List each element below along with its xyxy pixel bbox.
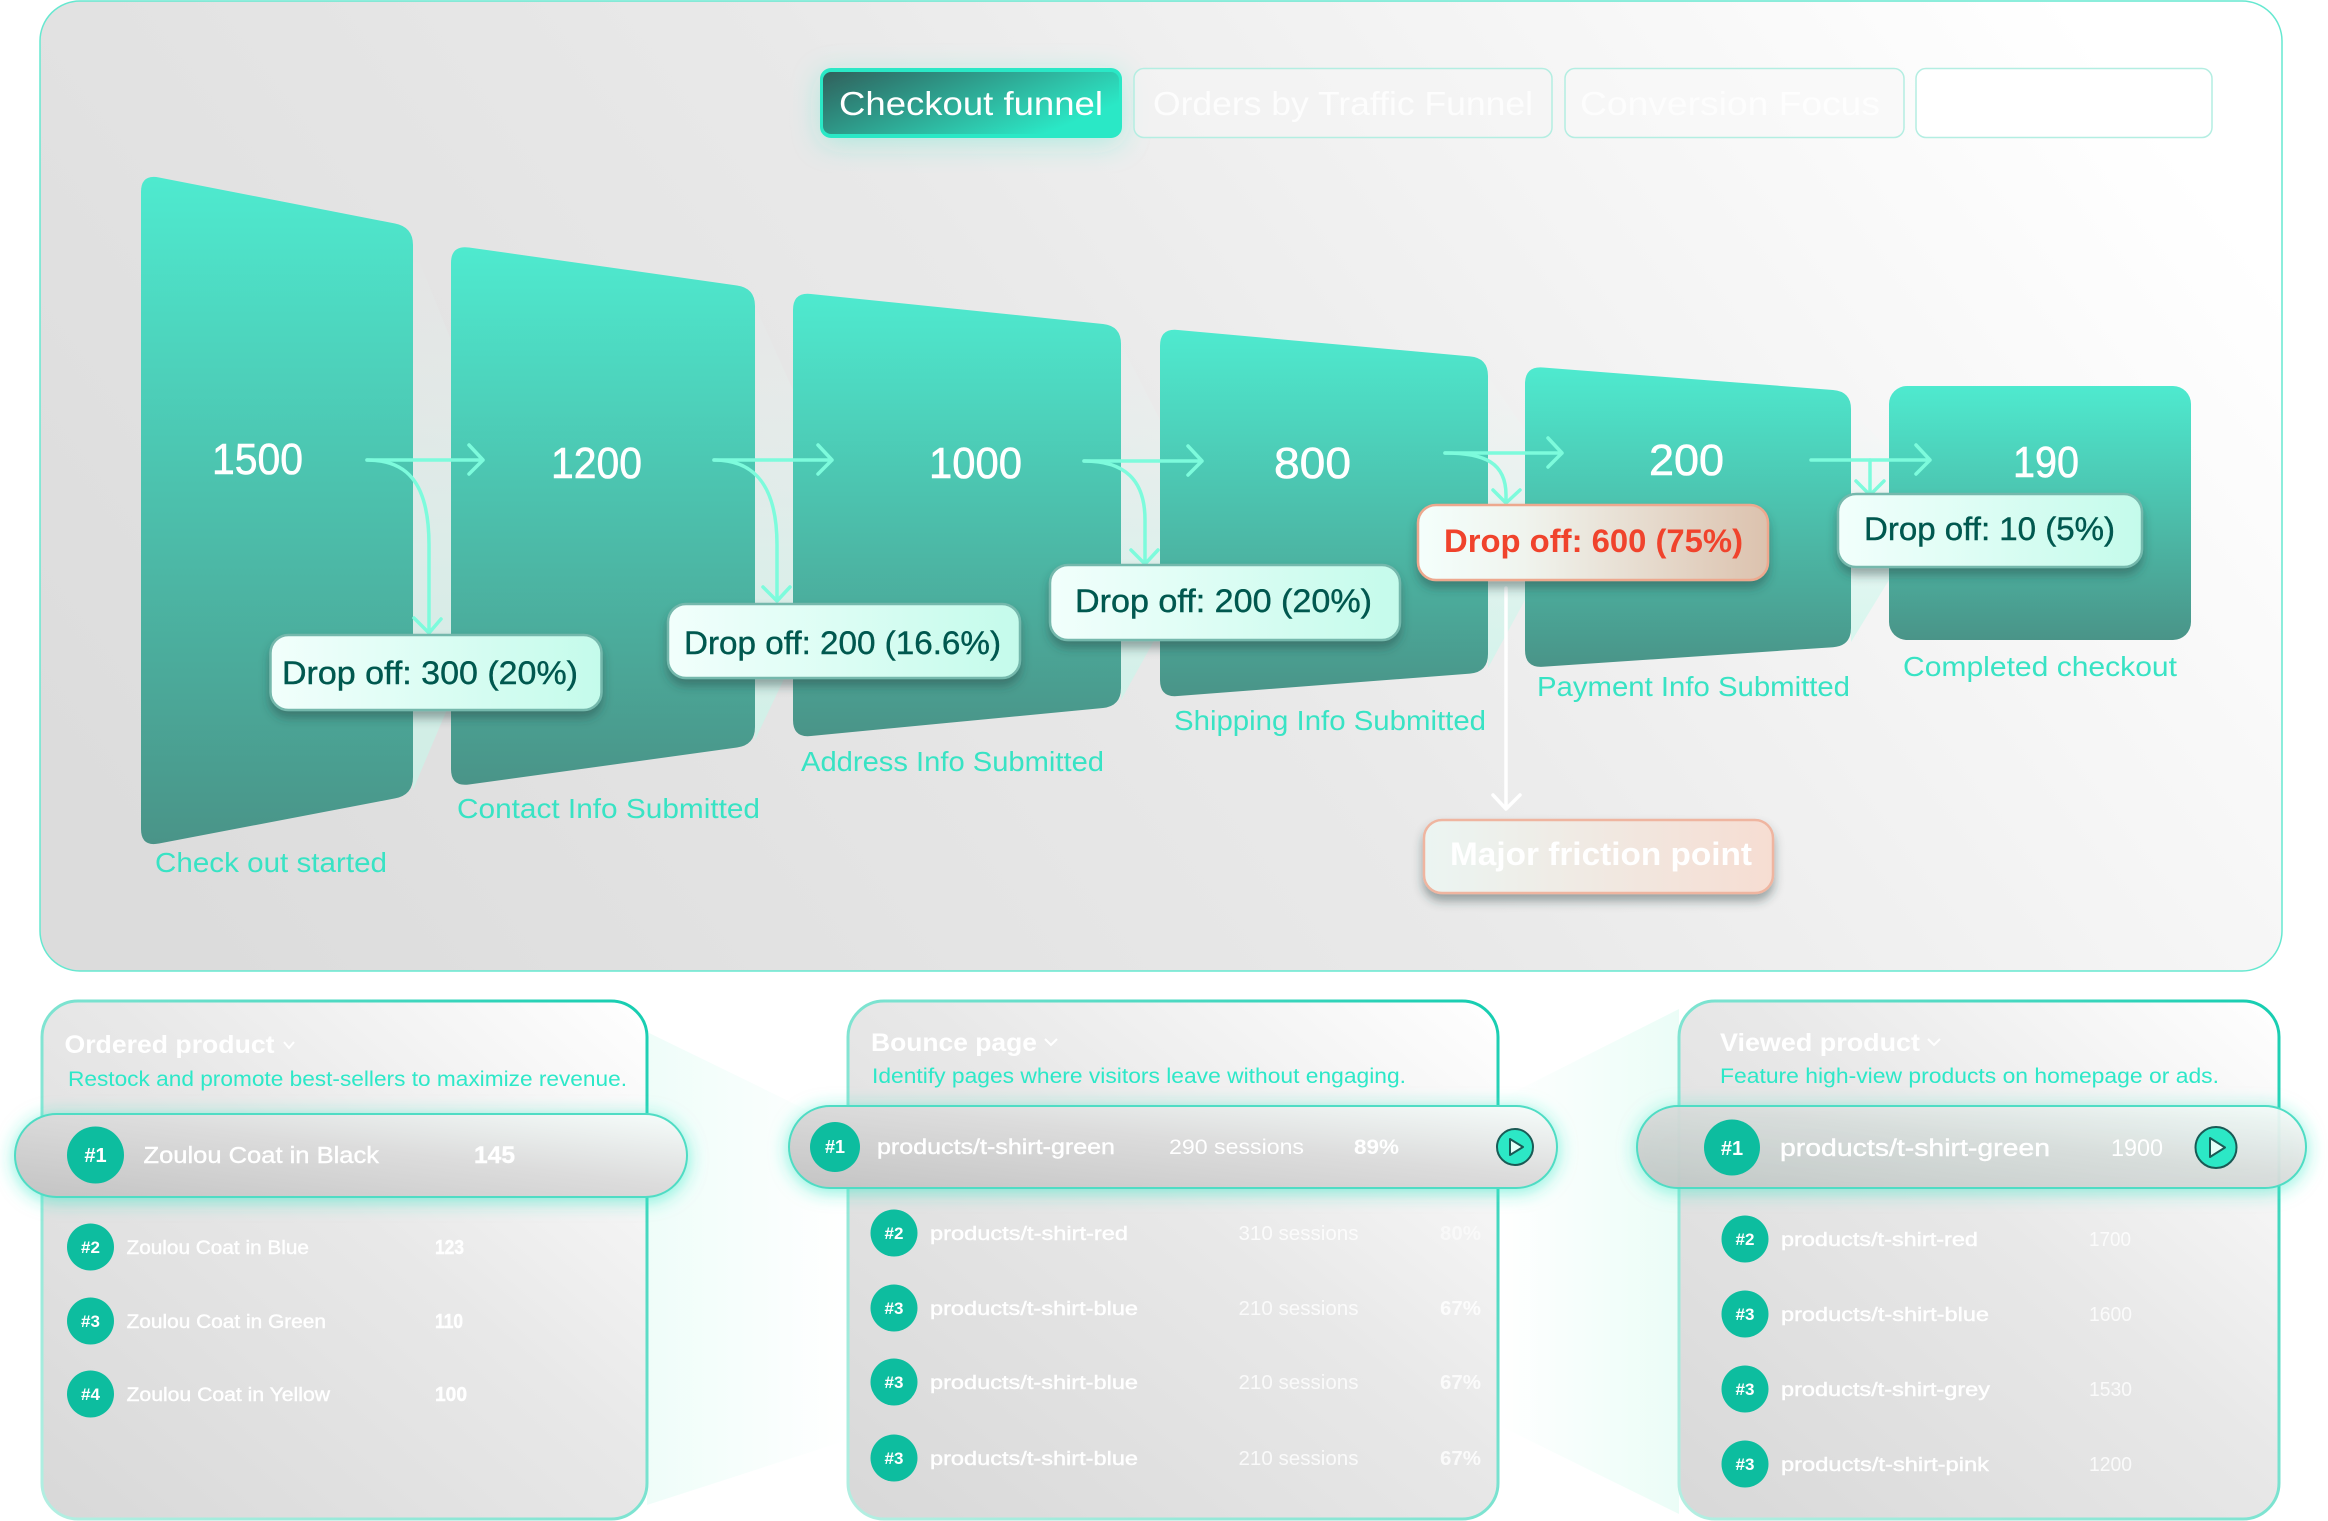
subtitle: Feature high-view products on homepage or ads. <box>1720 1065 2219 1088</box>
arrow: stage 4 to 5 with drop off <box>1445 438 1562 503</box>
row: #3: Zoulou Coat in Green <box>126 1312 326 1333</box>
arrow: stage 3 to 4 with drop off <box>1084 446 1202 564</box>
row: #3 third <box>870 1434 1481 1482</box>
panel: checkout funnel <box>40 1 2282 971</box>
icon: play <box>2196 1127 2236 1168</box>
row: #2 <box>1722 1216 2131 1262</box>
callout: drop off 200 (16.6%): Drop off: 200 (16.6%) <box>684 625 1001 661</box>
row: #2: Zoulou Coat in Blue <box>126 1238 309 1259</box>
row: #3 blue: 1600 <box>2089 1304 2132 1326</box>
funnel stage: Payment Info Submitted, 200: Payment Info Submitted <box>1537 671 1850 702</box>
row: #3 <box>870 1284 1481 1332</box>
highlight row: #1: products/t-shirt-green <box>877 1136 1115 1159</box>
highlight row: #1: 1900 <box>2111 1135 2163 1162</box>
callout: major friction point: Major friction point <box>1450 836 1752 872</box>
row: #4: 100 <box>435 1384 467 1406</box>
row: #3 pink: 1200 <box>2089 1454 2132 1476</box>
funnel stage: Shipping Info Submitted, 800: 800 <box>1274 439 1351 488</box>
row: #3: 67% <box>1440 1298 1481 1320</box>
arrow: stage 2 to 3 with drop off <box>714 445 832 601</box>
panel: bounce page <box>789 1001 1557 1519</box>
row: #3 <box>67 1298 463 1344</box>
row: #4: #4 <box>81 1385 100 1404</box>
row: #3 blue: #3 <box>1736 1305 1754 1324</box>
row: #3: 210 sessions <box>1238 1298 1358 1320</box>
row: #2: 310 sessions <box>1238 1223 1358 1245</box>
callout: major friction point <box>1424 820 1773 893</box>
row: #3 second: #3 <box>885 1373 903 1392</box>
row: #3 second <box>870 1358 1481 1406</box>
panel: viewed product <box>1637 1001 2306 1519</box>
highlight row: #1: #1 <box>1721 1138 1743 1160</box>
row: #2 <box>67 1224 464 1270</box>
subtitle: Restock and promote best-sellers to maximize revenue. <box>68 1068 627 1091</box>
row: #3 grey: 1530 <box>2089 1379 2132 1401</box>
funnel connectors <box>413 245 1889 790</box>
icon: play <box>1497 1129 1533 1165</box>
row: #2: #2 <box>885 1224 903 1243</box>
heading: ordered product: Ordered product <box>64 1031 275 1059</box>
tab: Conversion Focus <box>1565 68 1904 138</box>
funnel stage: Check out started, 1500: 1500 <box>212 435 303 484</box>
callout: drop off 200 (16.6%) <box>668 604 1020 678</box>
tab: Orders by Traffic Funnel <box>1134 68 1552 138</box>
callout: drop off 200 (20%): Drop off: 200 (20%) <box>1075 583 1372 619</box>
funnel stage: Contact Info Submitted, 1200: 1200 <box>551 439 642 488</box>
row: #3 third: products/t-shirt-blue <box>930 1449 1138 1470</box>
row: #3 second: 210 sessions <box>1238 1372 1358 1394</box>
row: #3: #3 <box>81 1312 100 1331</box>
subtitle: Identify pages where visitors leave without engaging. <box>872 1065 1406 1088</box>
heading: viewed product: Viewed product <box>1720 1029 1921 1057</box>
arrow: stage 1 to 2 with drop off <box>367 445 483 633</box>
highlight row: #1: #1 <box>84 1145 107 1167</box>
funnel stage: Check out started, 1500 <box>141 177 413 878</box>
row: #3 pink <box>1722 1440 2132 1488</box>
arrow: to major friction point <box>1493 588 1520 809</box>
row: #2: products/t-shirt-red <box>930 1224 1128 1245</box>
arrow: stage 5 to 6 with drop off <box>1811 445 1930 495</box>
funnel stage: Shipping Info Submitted, 800: Shipping Info Submitted <box>1174 705 1486 736</box>
row: #4 <box>67 1370 467 1418</box>
row: #3 grey: #3 <box>1736 1380 1754 1399</box>
highlight row: #1 <box>789 1106 1557 1188</box>
callout: drop off 300: Drop off: 300 (20%) <box>282 655 578 691</box>
row: #2 <box>870 1210 1481 1256</box>
row: #3 third: 67% <box>1440 1448 1481 1470</box>
funnel stage: Completed checkout, 190: Completed checkout <box>1903 651 2177 682</box>
highlight row: #1: 290 sessions <box>1169 1136 1304 1159</box>
row: #3 third: 210 sessions <box>1238 1448 1358 1470</box>
callout: drop off 300 <box>270 635 602 710</box>
row: #2: #2 <box>81 1238 100 1257</box>
funnel stage: Completed checkout, 190 <box>1889 386 2191 682</box>
row: #3 blue: products/t-shirt-blue <box>1781 1305 1989 1326</box>
callout: drop off 10 (5%) <box>1838 494 2142 567</box>
highlight row: #1: 89% <box>1354 1136 1399 1159</box>
row: #3 blue <box>1722 1290 2132 1338</box>
row: #3 pink: products/t-shirt-pink <box>1781 1455 1990 1476</box>
funnel stage: Check out started, 1500: Check out started <box>155 847 387 878</box>
tab: Conversion Focus: Conversion Focus <box>1580 85 1880 122</box>
row: #2: 1700 <box>2089 1229 2131 1251</box>
funnel stage: Address Info Submitted, 1000: 1000 <box>929 439 1022 488</box>
row: #3: 110 <box>435 1311 463 1333</box>
highlight row: #1 <box>15 1114 687 1197</box>
highlight row: #1: products/t-shirt-green <box>1780 1135 2050 1162</box>
heading: bounce page: Bounce page <box>871 1029 1037 1057</box>
tab: Checkout funnel (active) <box>820 68 1122 138</box>
tab: Checkout funnel (active): Checkout funnel <box>839 85 1103 122</box>
row: #3: products/t-shirt-blue <box>930 1299 1138 1320</box>
panel: ordered product <box>15 1001 687 1519</box>
highlight row: #1: 145 <box>474 1142 515 1169</box>
row: #4: Zoulou Coat in Yellow <box>126 1385 330 1406</box>
row: #2: 80% <box>1440 1223 1481 1245</box>
highlight row: #1 <box>1637 1106 2306 1188</box>
funnel stage: Shipping Info Submitted, 800 <box>1160 330 1488 736</box>
callout: drop off 600 (75%): Drop off: 600 (75%) <box>1444 523 1743 559</box>
row: #3 third: #3 <box>885 1449 903 1468</box>
row: #3 grey: products/t-shirt-grey <box>1781 1380 1991 1401</box>
funnel stage: Contact Info Submitted, 1200 <box>451 247 760 824</box>
row: #2: #2 <box>1736 1230 1754 1249</box>
funnel stage: Contact Info Submitted, 1200: Contact Info Submitted <box>457 793 760 824</box>
funnel stage: Address Info Submitted, 1000: Address Info Submitted <box>801 746 1104 777</box>
callout: drop off 600 (75%) <box>1418 505 1768 580</box>
row: #3 second: 67% <box>1440 1372 1481 1394</box>
tab: Orders by Traffic Funnel: Orders by Traffic Funnel <box>1153 85 1533 122</box>
funnel stage: Payment Info Submitted, 200: 200 <box>1649 436 1724 485</box>
row: #3 second: products/t-shirt-blue <box>930 1373 1138 1394</box>
row: #2: products/t-shirt-red <box>1781 1230 1978 1251</box>
funnel stage: Completed checkout, 190: 190 <box>2013 438 2079 487</box>
tab: empty <box>1916 68 2212 138</box>
highlight row: #1: Zoulou Coat in Black <box>144 1142 380 1168</box>
tab bar <box>820 68 2212 138</box>
callout: drop off 10 (5%): Drop off: 10 (5%) <box>1864 511 2115 547</box>
row: #3 pink: #3 <box>1736 1455 1754 1474</box>
funnel stage: Payment Info Submitted, 200 <box>1525 367 1851 702</box>
row: #2: 123 <box>435 1237 464 1259</box>
callout: drop off 200 (20%) <box>1050 565 1400 640</box>
funnel stage: Address Info Submitted, 1000 <box>793 294 1121 777</box>
row: #3 grey <box>1722 1366 2132 1412</box>
highlight row: #1: #1 <box>825 1137 845 1157</box>
panel connectors <box>647 1009 1679 1514</box>
row: #3: #3 <box>885 1299 903 1318</box>
